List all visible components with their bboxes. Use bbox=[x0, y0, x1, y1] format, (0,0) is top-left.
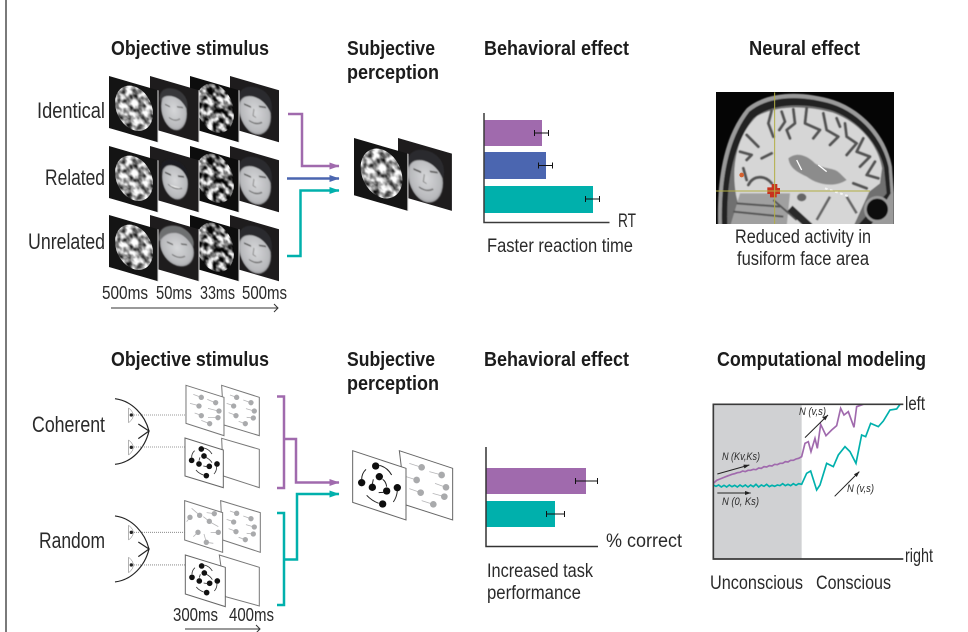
row label: coherent: Coherent bbox=[32, 412, 105, 437]
bracket arrow: random to perception bbox=[277, 494, 339, 605]
arrow: time, bottom bbox=[185, 625, 260, 632]
annotations: drift labels: N (0, Ks) bbox=[722, 496, 759, 508]
row label: identical: Identical bbox=[37, 98, 105, 123]
line: purple accumulator bbox=[713, 404, 863, 483]
caption: increased task performance: Increased task bbox=[487, 561, 593, 582]
heading: subjective perception, bottom: perception bbox=[347, 373, 439, 395]
caption: increased task performance: performance bbox=[487, 583, 581, 604]
row label: random: Random bbox=[39, 528, 105, 553]
heading: behavioral effect, top: Behavioral effect bbox=[484, 38, 629, 60]
bar chart: reaction time: RT bbox=[618, 211, 636, 232]
chart: computational model: right bbox=[905, 546, 934, 567]
line: teal accumulator bbox=[713, 404, 900, 490]
caption: reduced activity: Reduced activity in bbox=[735, 227, 871, 248]
heading: neural effect: Neural effect bbox=[749, 38, 860, 60]
icon: head with eyes bbox=[115, 399, 185, 464]
stimulus diagram: coherent bbox=[115, 385, 259, 488]
heading: behavioral effect, bottom: Behavioral effect bbox=[484, 349, 629, 371]
timing labels, bottom bbox=[173, 605, 274, 625]
subjective perception frames, bottom bbox=[353, 451, 453, 520]
icon: head with eyes bbox=[115, 516, 185, 582]
timing labels, top: 500ms bbox=[102, 283, 148, 303]
brain scan bbox=[716, 92, 894, 227]
heading: subjective perception, bottom: Subjective bbox=[347, 349, 435, 371]
timing labels, top: 50ms bbox=[156, 283, 192, 303]
stimulus frames: random bbox=[185, 501, 260, 607]
arrows: drift vectors bbox=[717, 415, 859, 496]
caption: reduced activity bbox=[735, 227, 871, 270]
heading: subjective perception, bottom bbox=[347, 349, 439, 395]
bar chart: percent correct: % correct bbox=[606, 531, 683, 552]
bar chart: reaction time bbox=[484, 113, 636, 232]
image sequence: unrelated bbox=[109, 215, 279, 281]
arrow: time, top bbox=[111, 304, 278, 312]
caption: unconscious: Unconscious bbox=[710, 573, 803, 594]
heading: computational modeling: Computational modeling bbox=[717, 349, 926, 371]
arrow: unrelated to perception bbox=[287, 190, 339, 256]
heading: subjective perception, top: Subjective bbox=[347, 38, 435, 60]
arrow: identical to perception bbox=[288, 114, 339, 166]
caption: conscious: Conscious bbox=[816, 573, 891, 594]
timing labels, top: 500ms bbox=[242, 283, 287, 303]
row label: related: Related bbox=[45, 165, 105, 190]
image sequence: related bbox=[109, 146, 279, 212]
annotations: drift labels bbox=[722, 406, 874, 508]
annotations: drift labels: N (Kv,Ks) bbox=[722, 451, 760, 463]
caption: faster reaction time: Faster reaction time bbox=[487, 236, 633, 257]
annotations: drift labels: N (v,s) bbox=[799, 406, 826, 418]
timing labels, top: 33ms bbox=[200, 283, 235, 303]
caption: reduced activity: fusiform face area bbox=[737, 249, 869, 270]
arrow: related to perception bbox=[287, 177, 339, 180]
annotations: drift labels: N (v,s) bbox=[847, 483, 874, 495]
heading: objective stimulus, top: Objective stimulus bbox=[111, 38, 269, 60]
timing labels, bottom: 400ms bbox=[229, 605, 274, 625]
page margin rule bbox=[5, 0, 7, 632]
caption: increased task performance bbox=[487, 561, 593, 604]
subjective perception images, top bbox=[354, 138, 452, 211]
heading: subjective perception, top bbox=[347, 38, 439, 84]
timing labels, bottom: 300ms bbox=[173, 605, 218, 625]
image sequence: identical bbox=[109, 76, 279, 142]
stimulus diagram: random bbox=[115, 501, 260, 607]
heading: objective stimulus, bottom: Objective stimulus bbox=[111, 349, 269, 371]
timing labels, top bbox=[102, 283, 287, 303]
stimulus frames: coherent bbox=[185, 385, 259, 488]
heading: subjective perception, top: perception bbox=[347, 62, 439, 84]
bracket arrow: coherent to perception bbox=[277, 396, 339, 488]
chart: computational model bbox=[713, 394, 934, 567]
row label: unrelated: Unrelated bbox=[28, 229, 105, 254]
chart: computational model: left bbox=[905, 394, 926, 415]
bar chart: percent correct bbox=[486, 447, 683, 552]
